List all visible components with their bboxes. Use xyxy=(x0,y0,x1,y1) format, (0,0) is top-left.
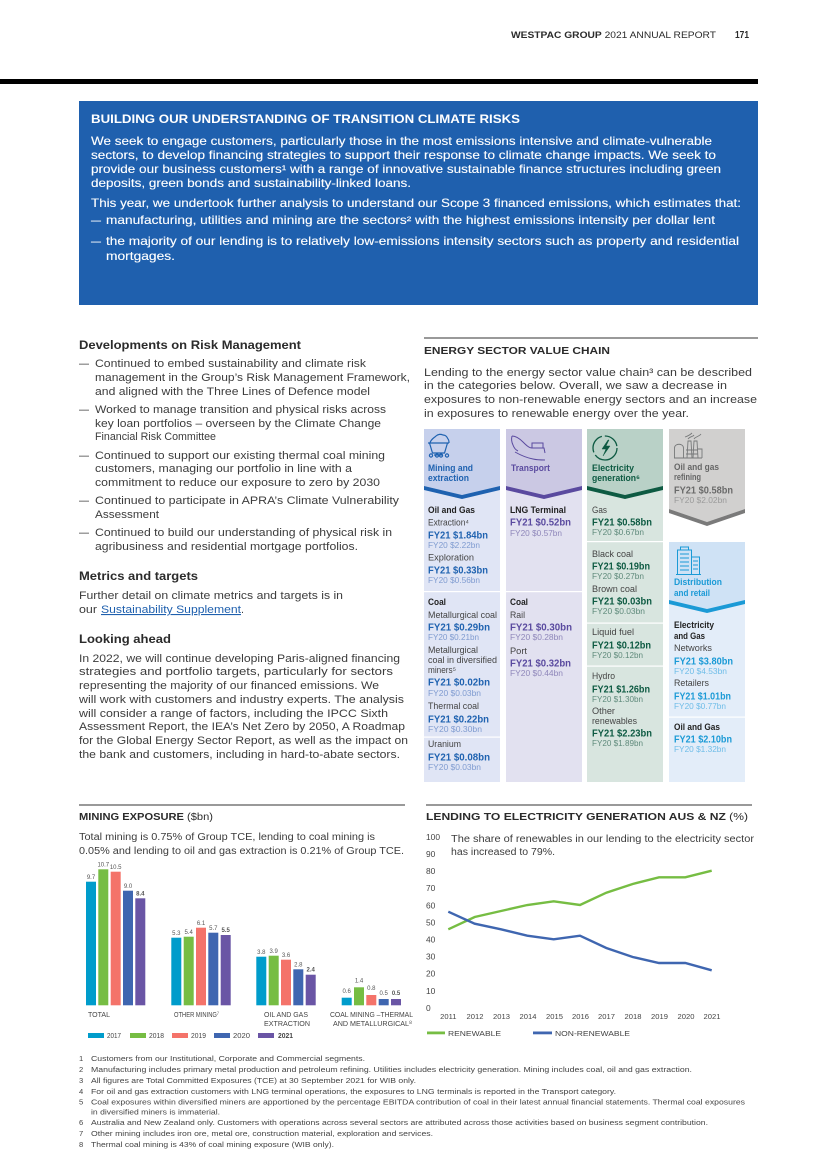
panel: electricity generation: Black coal xyxy=(592,549,633,559)
panel text block: We seek to engage customers, particularly those in the most emissions intensive and climate-vulnerable xyxy=(91,135,712,148)
y axis labels: 20 xyxy=(426,968,436,978)
panel: mining and extraction: FY20 $0.03bn xyxy=(428,763,481,772)
panel: oil and gas refining: FY21 $0.58bn xyxy=(674,486,733,496)
panel: mining and extraction: Metallurgical coal xyxy=(428,610,497,620)
y axis labels: 90 xyxy=(426,849,436,859)
line chart: renewable vs non-renewable lending xyxy=(426,832,755,1038)
bars: oil and gas extraction: 3.9 xyxy=(270,949,279,955)
panel: mining and extraction: Mining and xyxy=(428,463,473,473)
panel text block: sectors, to develop financing strategies to support their response to climate change impacts. We seek to xyxy=(91,149,716,162)
bars: coal mining: 0.5 xyxy=(392,991,401,997)
panel text block: — xyxy=(91,235,101,248)
panel: mining and extraction: FY21 $0.29bn xyxy=(428,622,490,634)
panel: mining and extraction: FY20 $0.56bn xyxy=(428,576,480,585)
chart annotation xyxy=(451,834,755,858)
text block: developments on risk management: Continued to build our understanding of physical risk in xyxy=(95,527,392,539)
chart annotation: The share of renewables in our lending to the electricity sector xyxy=(451,834,755,845)
panel: transport: FY20 $0.28bn xyxy=(510,633,563,642)
panel: distribution and retail: Networks xyxy=(674,643,713,653)
panel: mining and extraction: miners⁵ xyxy=(428,665,456,675)
panel: electricity generation: Liquid fuel xyxy=(592,627,634,637)
page header: WESTPAC GROUP 2021 ANNUAL REPORT xyxy=(511,30,717,40)
panel: transport: FY21 $0.32bn xyxy=(510,658,571,670)
panel: electricity generation: Brown coal xyxy=(592,584,637,594)
text block: developments on risk management: management in the Group’s Risk Management Framework, xyxy=(95,372,410,384)
bars: oil and gas extraction: 2.4 xyxy=(307,968,316,974)
panel: mining and extraction: FY20 $0.03bn xyxy=(428,689,481,698)
heading: mining exposure: MINING EXPOSURE ($bn) xyxy=(79,811,213,823)
panel: mining and extraction: Exploration xyxy=(428,553,474,563)
panel: mining and extraction: FY20 $2.22bn xyxy=(428,541,480,550)
text block: developments on risk management: Developments on Risk Management xyxy=(79,340,301,352)
panel: electricity generation: FY20 $1.89bn xyxy=(592,739,643,748)
panel: oil and gas refining: Oil and gas xyxy=(674,462,719,472)
bars: oil and gas extraction: 3.8 xyxy=(257,950,266,956)
footnotes: For oil and gas extraction customers with LNG terminal operations, the exposures to LNG terminals is reported in the Transport category. xyxy=(91,1087,616,1096)
chart annotation: has increased to 79%. xyxy=(451,847,555,858)
panel: mining and extraction: Uranium xyxy=(428,739,461,749)
bars: coal mining: 0.5 xyxy=(380,991,389,997)
text block: developments on risk management: key loan portfolios – overseen by the Climate Change xyxy=(95,418,381,430)
heading: energy sector value chain: ENERGY SECTOR VALUE CHAIN xyxy=(424,345,610,357)
y axis labels: 40 xyxy=(426,934,436,944)
panel: distribution and retail: Oil and Gas xyxy=(674,722,720,732)
bars: other mining: 6.1 xyxy=(197,921,206,927)
panel: oil and gas refining: FY20 $2.02bn xyxy=(674,496,727,505)
category labels: OIL AND GAS xyxy=(264,1010,308,1019)
text block: mining exposure intro: 0.05% and lending to oil and gas extraction is 0.21% of Group TCE. xyxy=(79,846,404,857)
text block: energy sector intro: exposures to non-renewable energy sectors and an increase xyxy=(424,394,757,406)
panel: mining and extraction: Coal xyxy=(428,597,446,607)
footnotes: Australia and New Zealand only. Customers with operations across several sectors are attributed across those activities based on business segment contribution. xyxy=(91,1118,708,1127)
text block: looking ahead: will work with customers and industry experts. The analysis xyxy=(78,694,405,706)
panel: distribution and retail: and Gas xyxy=(674,631,705,641)
text block: looking ahead: In 2022, we will continue developing Paris-aligned financing xyxy=(79,653,400,665)
panel: distribution and retail: and retail xyxy=(674,588,710,598)
panel: electricity generation: generation⁶ xyxy=(592,473,640,483)
category labels: EXTRACTION xyxy=(264,1019,310,1028)
panel text block: — xyxy=(91,214,101,227)
y axis labels: 0 xyxy=(426,1003,431,1013)
y axis labels: 80 xyxy=(426,866,436,876)
panel: electricity generation: FY20 $1.30bn xyxy=(592,695,643,704)
bars: other mining: 5.7 xyxy=(209,926,218,932)
text block: developments on risk management: Assessment xyxy=(95,509,159,521)
text block: looking ahead: the bank and customers, including in hard-to-abate sectors. xyxy=(79,749,400,761)
panel: electricity generation: renewables xyxy=(592,716,638,726)
panel: electricity generation: FY21 $0.58bn xyxy=(592,518,652,528)
panel: distribution and retail: FY21 $1.01bn xyxy=(674,692,731,702)
text block: metrics and targets: our xyxy=(79,604,97,616)
panel: distribution and retail: FY20 $0.77bn xyxy=(674,702,726,711)
text block: developments on risk management: — xyxy=(79,404,89,416)
footnotes: 7 xyxy=(79,1129,83,1138)
text block: looking ahead: Looking ahead xyxy=(79,634,171,646)
text block: developments on risk management xyxy=(79,340,410,553)
panel: mining and extraction xyxy=(424,429,500,782)
panel: electricity generation: FY21 $0.12bn xyxy=(592,640,651,652)
x axis labels: 2018 xyxy=(625,1012,641,1021)
panel: electricity generation: FY20 $0.27bn xyxy=(592,572,644,581)
text block: metrics and targets xyxy=(79,571,343,616)
bars: total: 9.0 xyxy=(124,884,133,890)
footnotes: in diversified miners is immaterial. xyxy=(91,1108,220,1116)
category labels: AND METALLURGICAL⁸ xyxy=(333,1019,412,1028)
panel: mining and extraction: Thermal coal xyxy=(428,701,479,711)
footnotes: 3 xyxy=(79,1076,83,1085)
text block: developments on risk management: Financial Risk Committee xyxy=(95,431,216,443)
text block: looking ahead xyxy=(78,634,408,761)
bars: other mining: 5.4 xyxy=(185,930,194,936)
bars: total: 10.7 xyxy=(97,862,110,868)
footnotes: Coal exposures within diversified miners are apportioned by the percentage EBITDA contribution of coal in their latest annual financial statements. Thermal coal exposures xyxy=(91,1098,745,1106)
chart legend: 2018 xyxy=(149,1031,164,1040)
category labels: COAL MINING –THERMAL xyxy=(330,1010,413,1019)
text block: mining exposure intro xyxy=(79,832,404,857)
text block: developments on risk management: — xyxy=(79,495,89,507)
bars: oil and gas extraction: 3.6 xyxy=(282,953,291,959)
panel heading: BUILDING OUR UNDERSTANDING OF TRANSITION CLIMATE RISKS xyxy=(91,113,520,126)
panel text block: mortgages. xyxy=(106,250,175,263)
text block: developments on risk management: — xyxy=(79,527,89,539)
heading: lending to electricity generation: LENDING TO ELECTRICITY GENERATION AUS & NZ (%) xyxy=(426,811,748,823)
text block: developments on risk management: — xyxy=(79,450,89,462)
text block: looking ahead: strategies and portfolio targets, particularly for sectors xyxy=(79,666,394,678)
bars: total: 10.5 xyxy=(110,865,122,871)
icon: ship xyxy=(512,436,545,460)
panel: transport: Port xyxy=(510,646,528,656)
y axis labels: 30 xyxy=(426,952,436,962)
icon: mine cart xyxy=(428,434,449,457)
text block: developments on risk management: Continued to support our existing thermal coal mining xyxy=(95,450,385,462)
panel: electricity generation: Hydro xyxy=(592,671,615,681)
panel: transport xyxy=(506,429,582,782)
text block: energy sector intro: Lending to the energy sector value chain³ can be described xyxy=(424,367,752,379)
panel: distribution and retail: Distribution xyxy=(674,577,722,587)
x axis labels: 2013 xyxy=(493,1012,510,1021)
bars: coal mining xyxy=(342,978,401,1005)
footnotes: 1 xyxy=(79,1054,83,1063)
x axis labels: 2011 xyxy=(440,1012,456,1021)
text block: looking ahead: Assessment Report, the IEA’s Net Zero by 2050, A Roadmap xyxy=(79,721,405,733)
panel: building our understanding of transition climate risks xyxy=(79,101,758,305)
line: renewable xyxy=(448,871,712,929)
chart legend: 2019 xyxy=(191,1031,206,1040)
bars: coal mining: 0.8 xyxy=(367,986,376,992)
bars: other mining: 5.5 xyxy=(222,928,231,934)
bars: coal mining: 0.6 xyxy=(343,989,352,995)
panel text block: provide our business customers¹ with a range of innovative sustainable finance structures including green xyxy=(91,163,721,176)
y axis labels: 70 xyxy=(426,883,436,893)
panel: distribution and retail: FY21 $3.80bn xyxy=(674,656,733,668)
y axis labels: 10 xyxy=(426,986,436,996)
footnotes: Thermal coal mining is 43% of coal mining exposure (WIB only). xyxy=(91,1140,334,1149)
text block: metrics and targets: Metrics and targets xyxy=(79,571,198,583)
panel: electricity generation: FY20 $0.12bn xyxy=(592,651,643,660)
panel: transport: FY20 $0.44bn xyxy=(510,669,563,678)
x axis labels xyxy=(440,1012,720,1021)
panel text block: This year, we undertook further analysis to understand our Scope 3 financed emissions, which estimates that: xyxy=(91,197,741,210)
text block: developments on risk management: and aligned with the Three Lines of Defence model xyxy=(95,386,370,398)
text block: mining exposure intro: Total mining is 0.75% of Group TCE, lending to coal mining is xyxy=(79,832,375,843)
panel text block: deposits, green bonds and sustainability-linked loans. xyxy=(91,177,411,190)
category labels: OTHER MINING⁷ xyxy=(174,1010,219,1019)
panel: electricity generation: FY21 $0.03bn xyxy=(592,596,652,608)
x axis labels: 2014 xyxy=(520,1012,536,1021)
text block: energy sector intro: in exposures to renewable energy over the year. xyxy=(424,408,689,420)
panel: distribution and retail: FY20 $4.53bn xyxy=(674,667,727,676)
panel: electricity generation: FY21 $2.23bn xyxy=(592,728,652,740)
x axis labels: 2015 xyxy=(546,1012,563,1021)
panel: electricity generation: Other xyxy=(592,706,615,716)
x axis labels: 2016 xyxy=(572,1012,589,1021)
panel: mining and extraction: FY21 $1.84bn xyxy=(428,530,488,542)
icon: refinery xyxy=(674,433,702,458)
bars: other mining xyxy=(171,921,231,1005)
panel text block: the majority of our lending is to relatively low-emissions intensity sectors such as property and residential xyxy=(106,235,739,248)
panel: mining and extraction: FY21 $0.33bn xyxy=(428,566,488,576)
panel: transport: FY21 $0.52bn xyxy=(510,518,571,528)
category labels xyxy=(88,1010,413,1028)
y axis labels: 100 xyxy=(426,832,440,842)
text block: developments on risk management: Worked to manage transition and physical risks across xyxy=(95,404,387,416)
footnotes: 8 xyxy=(79,1140,83,1149)
panel: mining and extraction: coal in diversified xyxy=(428,655,497,665)
text block: metrics and targets: . xyxy=(241,604,244,616)
text block: developments on risk management: commitment to reduce our exposure to zero by 2030 xyxy=(95,477,380,489)
panel: mining and extraction: FY21 $0.02bn xyxy=(428,678,490,688)
y axis labels xyxy=(426,832,440,1013)
panel: distribution and retail: Electricity xyxy=(674,620,714,630)
page header: 171 xyxy=(735,30,749,41)
panel: mining and extraction: FY20 $0.21bn xyxy=(428,633,479,642)
text block: developments on risk management: agribusiness and residential mortgage portfolios. xyxy=(95,541,358,553)
footnotes: Manufacturing includes primary metal production and petroleum refining. Utilities includes electricity generation. Mining includes coal, oil and gas extraction. xyxy=(91,1065,692,1074)
panel: mining and extraction: FY21 $0.22bn xyxy=(428,714,489,726)
bars: coal mining: 1.4 xyxy=(355,978,364,984)
footnotes: 4 xyxy=(79,1087,83,1096)
footnotes: 6 xyxy=(79,1118,83,1127)
panel: mining and extraction: FY21 $0.08bn xyxy=(428,752,490,764)
panel: transport: FY20 $0.57bn xyxy=(510,529,562,538)
panel: transport: Coal xyxy=(510,597,528,607)
panel: electricity generation: FY21 $1.26bn xyxy=(592,684,650,696)
panel: distribution and retail xyxy=(669,542,745,782)
chart legend: RENEWABLE xyxy=(448,1029,501,1038)
text block: metrics and targets: Sustainability Supplement xyxy=(101,604,241,616)
chart legend: 2017 xyxy=(107,1031,121,1040)
panel text block: manufacturing, utilities and mining are the sectors² with the highest emissions intensity per dollar lent xyxy=(106,214,716,227)
category labels: TOTAL xyxy=(88,1010,110,1019)
text block: energy sector intro: in the categories below. Overall, we saw a decrease in xyxy=(424,380,727,392)
chart legend: NON-RENEWABLE xyxy=(555,1029,630,1038)
footnotes: 5 xyxy=(79,1098,83,1106)
panel: distribution and retail: FY21 $2.10bn xyxy=(674,734,732,746)
text block: metrics and targets: Further detail on climate metrics and targets is in xyxy=(79,590,343,602)
chart legend: 2021 xyxy=(278,1031,294,1040)
panel: mining and extraction: Metallurgical xyxy=(428,645,478,655)
panel: electricity generation: Electricity xyxy=(592,463,634,473)
footnotes: Customers from our Institutional, Corporate and Commercial segments. xyxy=(91,1054,365,1063)
icon: lightning bolt in circle xyxy=(593,436,617,460)
text block: looking ahead: will consider a range of factors, including the IPCC Sixth xyxy=(78,708,388,720)
panel: oil and gas refining xyxy=(669,429,745,526)
panel: electricity generation: FY21 $0.19bn xyxy=(592,562,650,572)
bars: oil and gas extraction: 2.8 xyxy=(294,962,303,968)
panel: transport: Transport xyxy=(511,463,550,473)
x axis labels: 2020 xyxy=(678,1012,694,1021)
panel: electricity generation xyxy=(587,429,663,782)
chart legend: 2020 xyxy=(233,1031,250,1040)
panel: electricity generation: FY20 $0.67bn xyxy=(592,528,644,537)
x axis labels: 2017 xyxy=(598,1012,615,1021)
bars: total xyxy=(86,862,145,1005)
panel: oil and gas refining: refining xyxy=(674,472,701,482)
panel: mining and extraction: Oil and Gas xyxy=(428,505,475,515)
line: non-renewable xyxy=(448,912,712,970)
bar chart: mining exposure xyxy=(86,862,413,1040)
text block: looking ahead: for the Global Energy Sector Report, as well as the impact on xyxy=(79,735,408,747)
bars: total: 9.7 xyxy=(87,875,96,881)
panel: mining and extraction: Extraction⁴ xyxy=(428,518,469,528)
footnotes: 2 xyxy=(79,1065,83,1074)
panel: transport: LNG Terminal xyxy=(510,505,566,515)
panel: transport: Rail xyxy=(510,610,525,620)
x axis labels: 2019 xyxy=(651,1012,668,1021)
text block: developments on risk management: Continued to participate in APRA’s Climate Vulnerability xyxy=(95,495,400,507)
bars: oil and gas extraction xyxy=(256,949,316,1005)
bars: other mining: 5.3 xyxy=(172,931,181,937)
panel: mining and extraction: extraction xyxy=(428,473,469,483)
icon: office buildings xyxy=(676,547,701,574)
text block: developments on risk management: — xyxy=(79,358,89,370)
bars: total: 8.4 xyxy=(136,892,145,898)
chart legend xyxy=(88,1031,294,1040)
footnotes: All figures are Total Committed Exposures (TCE) at 30 September 2021 for WIB only. xyxy=(91,1076,416,1085)
x axis labels: 2012 xyxy=(467,1012,483,1021)
panel: distribution and retail: FY20 $1.32bn xyxy=(674,745,726,754)
footnotes: Other mining includes iron ore, metal ore, construction material, exploration and services. xyxy=(91,1129,433,1138)
panel: transport: FY21 $0.30bn xyxy=(510,622,572,634)
x axis labels: 2021 xyxy=(704,1012,720,1021)
panel: distribution and retail: Retailers xyxy=(674,678,710,688)
text block: developments on risk management: Continued to embed sustainability and climate risk xyxy=(95,358,367,370)
panel: mining and extraction: FY20 $0.30bn xyxy=(428,725,482,734)
chart legend xyxy=(427,1029,630,1038)
y axis labels: 50 xyxy=(426,918,436,928)
text block: looking ahead: representing the majority of our financed emissions. We xyxy=(79,680,379,692)
panel: electricity generation: Gas xyxy=(592,505,608,515)
footnotes xyxy=(79,1054,745,1149)
panel: electricity generation: FY20 $0.03bn xyxy=(592,607,645,616)
text block: energy sector intro xyxy=(424,367,757,420)
panel text block xyxy=(91,135,741,263)
y axis labels: 60 xyxy=(426,900,436,910)
text block: developments on risk management: customers, managing our portfolio in line with a xyxy=(95,463,353,475)
